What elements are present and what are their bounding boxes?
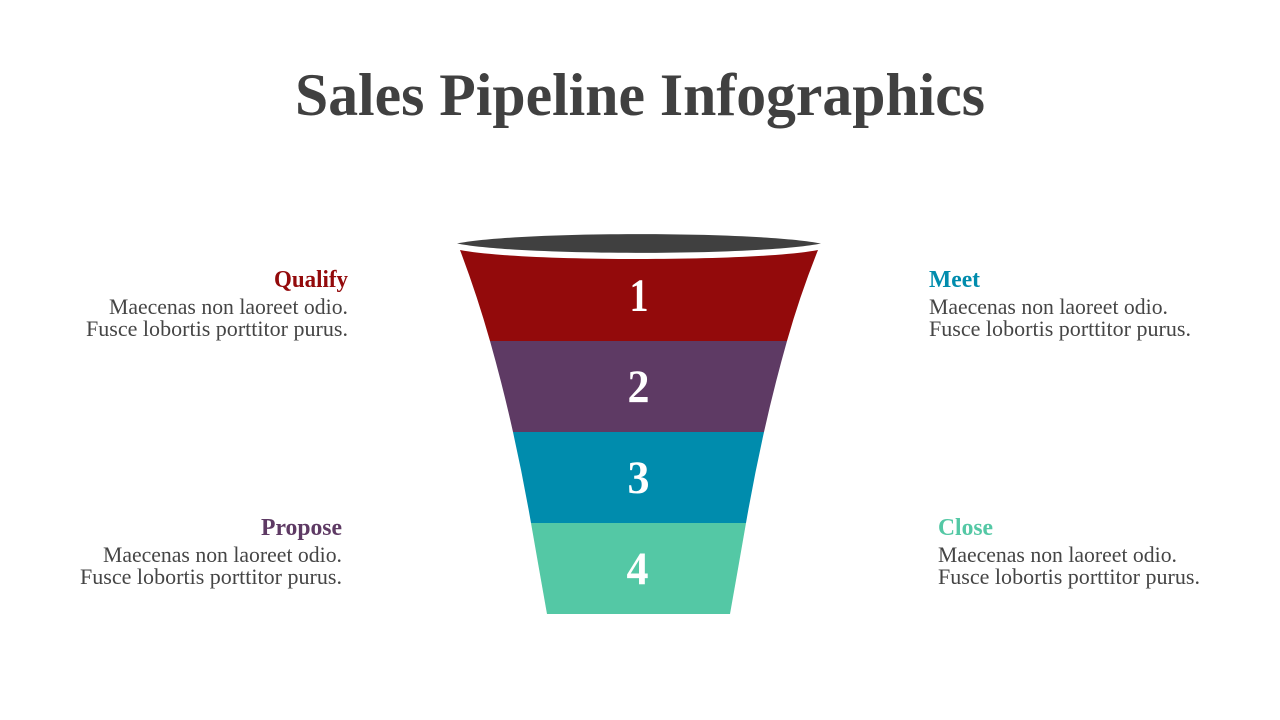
text block: Propose: Propose [261, 515, 342, 541]
funnel segment 4 [531, 523, 746, 614]
text block: Propose [80, 515, 342, 589]
funnel segment 3: 3 [628, 452, 650, 504]
text block: Meet [929, 267, 1191, 341]
funnel segment 1: 1 [630, 270, 648, 322]
text block: Propose: Maecenas non laoreet odio. [103, 542, 342, 567]
text block: Meet: Meet [929, 267, 980, 293]
text block: Qualify [86, 267, 348, 341]
text block: Close: Close [938, 515, 993, 541]
funnel segment 4: 4 [626, 543, 648, 595]
text block: Meet: Fusce lobortis porttitor purus. [929, 316, 1191, 341]
funnel [457, 234, 821, 614]
text block: Qualify: Fusce lobortis porttitor purus. [86, 316, 348, 341]
text block: Close: Fusce lobortis porttitor purus. [938, 564, 1200, 589]
text block: Close [938, 515, 1200, 589]
text block: Qualify: Maecenas non laoreet odio. [109, 294, 348, 319]
funnel segment 2: 2 [628, 361, 650, 413]
funnel segment 1 [460, 250, 818, 341]
text block: Propose: Fusce lobortis porttitor purus. [80, 564, 342, 589]
text block: Close: Maecenas non laoreet odio. [938, 542, 1177, 567]
funnel segment 3 [513, 432, 764, 523]
funnel segment 2 [490, 341, 787, 432]
title: Sales Pipeline Infographics [295, 62, 985, 128]
text block: Meet: Maecenas non laoreet odio. [929, 294, 1168, 319]
text block: Qualify: Qualify [274, 267, 348, 293]
funnel rim [457, 234, 821, 253]
